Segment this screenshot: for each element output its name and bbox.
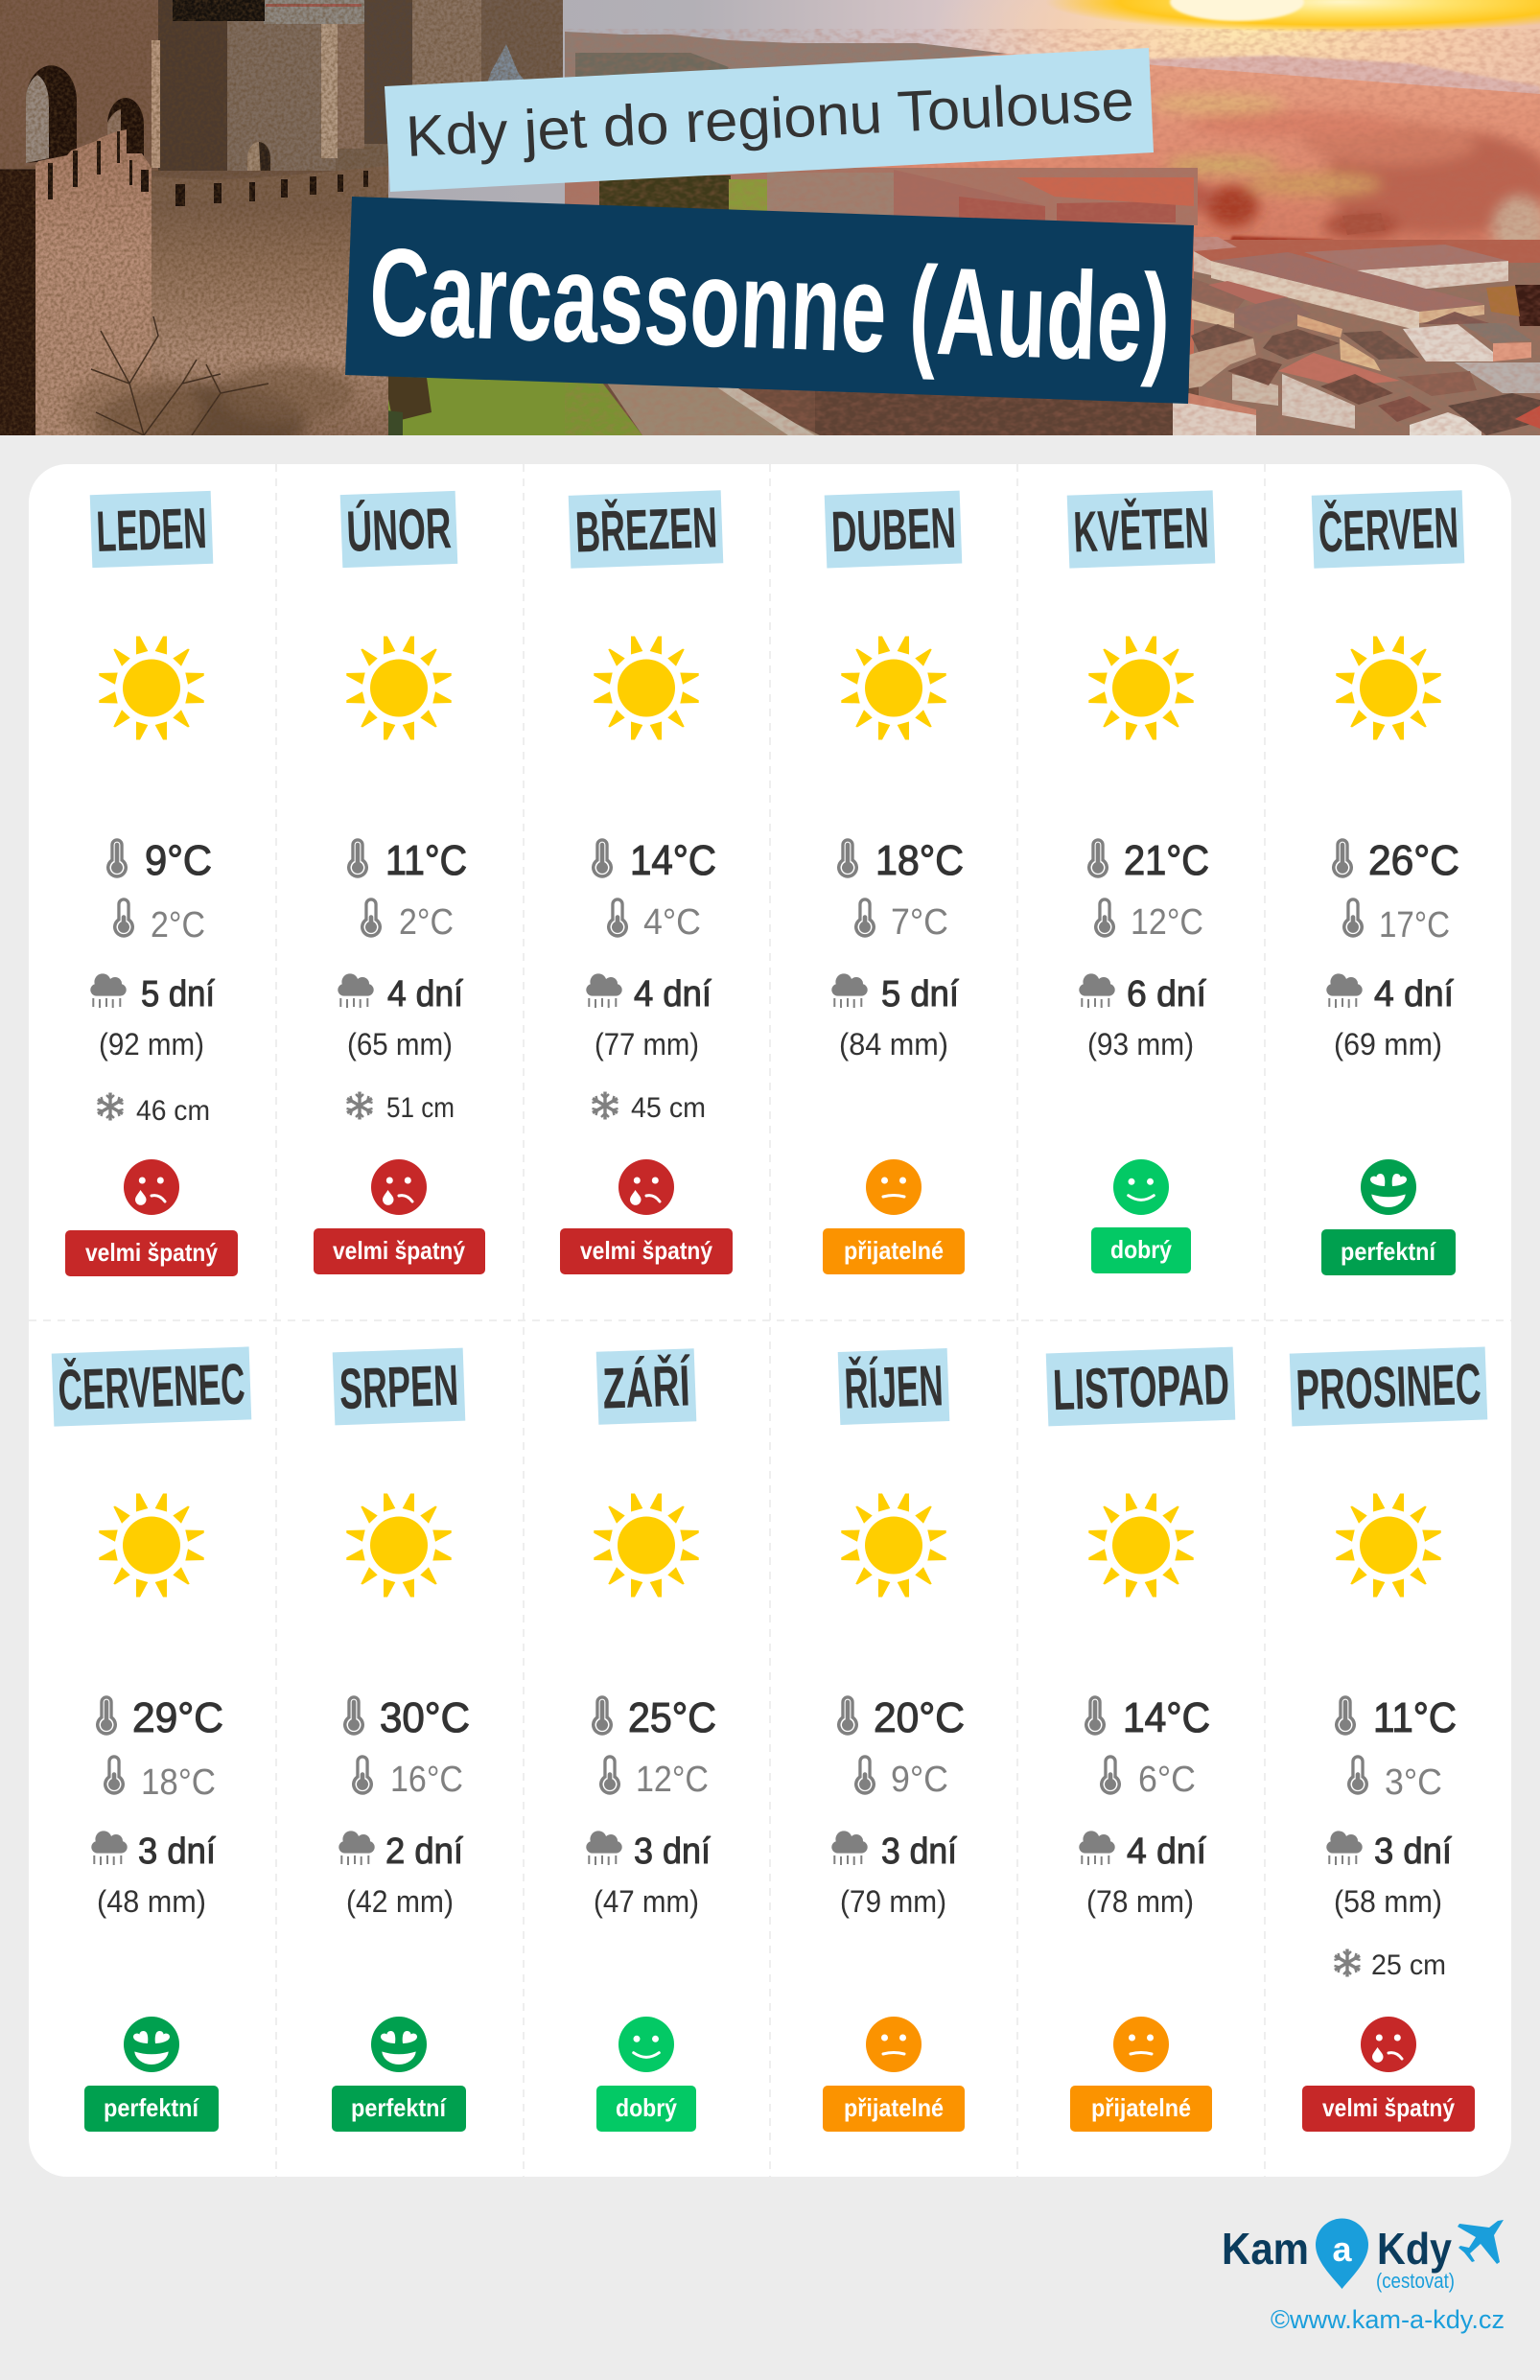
- month heading: LEDEN: [90, 491, 213, 568]
- panel: months table: [29, 464, 1511, 2177]
- icon: sun: [1336, 1494, 1441, 1598]
- rain days: [1326, 1831, 1452, 1872]
- rating badge: [823, 2086, 965, 2132]
- high temperature: [837, 837, 964, 884]
- rain days: [1079, 973, 1206, 1015]
- rain days: 4 dní: [634, 974, 712, 1015]
- month heading: DUBEN: [825, 491, 962, 568]
- month heading: LEDEN: LEDEN: [95, 496, 208, 564]
- rain days: 6 dní: [1127, 974, 1206, 1015]
- panel: PROSINEC: [1290, 1346, 1487, 2132]
- low temperature: 2°C: [151, 905, 205, 945]
- low temperature: [607, 898, 701, 943]
- logo: Kam a Kdy: [1222, 2219, 1504, 2293]
- panel: LEDEN: [65, 491, 238, 1276]
- rating badge: [65, 1230, 238, 1276]
- rating badge: přijatelné: [844, 2093, 944, 2122]
- icon: sun: [841, 637, 946, 740]
- rain days: 5 dní: [141, 974, 215, 1015]
- icon: rating face: [1361, 2017, 1416, 2072]
- town roofs and walls: [1173, 237, 1540, 435]
- rating badge: dobrý: [1110, 1235, 1172, 1264]
- rainfall: (92 mm): [99, 1027, 204, 1062]
- rain days: [831, 1831, 957, 1872]
- high temperature: [347, 837, 467, 884]
- low temperature: 3°C: [1385, 1762, 1442, 1803]
- low temperature: [352, 1755, 463, 1800]
- low temperature: [104, 1755, 216, 1803]
- icon: rating face: [618, 2017, 674, 2072]
- panel: ČERVENEC: [52, 1346, 251, 2132]
- icon: airplane: [1458, 2220, 1504, 2264]
- snow: 51 cm: [386, 1092, 455, 1124]
- rating badge: velmi špatný: [85, 1238, 218, 1267]
- low temperature: [1094, 898, 1203, 943]
- high temperature: [592, 837, 716, 884]
- low temperature: 17°C: [1379, 905, 1450, 945]
- logo: Kam a Kdy: (cestovat): [1376, 2269, 1455, 2293]
- high temperature: 25°C: [628, 1694, 716, 1741]
- rating badge: velmi špatný: [1322, 2093, 1455, 2122]
- rainfall: (69 mm): [1334, 1027, 1442, 1062]
- month heading: BŘEZEN: [569, 490, 723, 569]
- rain days: 5 dní: [881, 974, 959, 1015]
- month heading: ŘÍJEN: [838, 1348, 949, 1425]
- rainfall: (93 mm): [1087, 1027, 1194, 1062]
- rain days: 3 dní: [881, 1832, 957, 1872]
- snow: [98, 1093, 210, 1127]
- rating badge: [823, 1228, 965, 1274]
- rain days: [586, 1831, 711, 1872]
- icon: sun: [594, 1494, 699, 1598]
- rating badge: [1070, 2086, 1212, 2132]
- rating badge: [596, 2086, 696, 2132]
- icon: sun: [99, 1494, 204, 1598]
- high temperature: 30°C: [380, 1694, 470, 1741]
- icon: rating face: [371, 1159, 427, 1215]
- low temperature: [599, 1755, 709, 1800]
- rating badge: velmi špatný: [333, 1236, 465, 1265]
- rating badge: perfektní: [351, 2093, 447, 2122]
- snow: 25 cm: [1371, 1949, 1446, 1981]
- icon: sun: [1088, 1494, 1194, 1598]
- panel: ČERVEN: [1312, 490, 1464, 1275]
- icon: rating face: [866, 2017, 922, 2072]
- rain days: [91, 1831, 216, 1872]
- rain days: 4 dní: [1374, 974, 1454, 1015]
- low temperature: 2°C: [399, 902, 454, 943]
- rating badge: [84, 2086, 219, 2132]
- icon: sun: [1336, 637, 1441, 740]
- month heading: ÚNOR: [340, 491, 457, 568]
- castle: [0, 0, 563, 460]
- rain days: [338, 1831, 463, 1872]
- rainfall: (47 mm): [594, 1884, 699, 1919]
- low temperature: [1100, 1755, 1196, 1800]
- panel: ZÁŘÍ: [586, 1348, 716, 2132]
- high temperature: [106, 837, 212, 884]
- rain days: [1079, 1831, 1206, 1872]
- rain days: [90, 973, 215, 1015]
- month heading: DUBEN: DUBEN: [830, 496, 957, 564]
- month heading: BŘEZEN: BŘEZEN: [574, 495, 718, 565]
- high temperature: 11°C: [1373, 1694, 1457, 1741]
- month heading: LISTOPAD: [1046, 1347, 1235, 1426]
- month heading: ŘÍJEN: ŘÍJEN: [843, 1353, 945, 1421]
- panel: ŘÍJEN: [823, 1348, 965, 2132]
- high temperature: 20°C: [874, 1694, 965, 1741]
- icon: sun: [841, 1494, 946, 1598]
- icon: rating face: [1113, 2017, 1169, 2072]
- month heading: KVĚTEN: [1067, 490, 1215, 569]
- snow: 46 cm: [136, 1095, 210, 1127]
- rainfall: (77 mm): [595, 1027, 699, 1062]
- low temperature: 16°C: [390, 1760, 463, 1800]
- rating badge: přijatelné: [844, 1236, 944, 1265]
- icon: rating face: [866, 1159, 922, 1215]
- low temperature: [1347, 1755, 1442, 1803]
- high temperature: 11°C: [385, 837, 467, 884]
- icon: map pin: a: [1332, 2229, 1352, 2269]
- low temperature: 18°C: [141, 1762, 216, 1803]
- title banner: Carcassonne (Aude): [345, 197, 1194, 404]
- rain days: [338, 973, 463, 1015]
- rain days: 4 dní: [1127, 1832, 1206, 1872]
- month heading: ČERVENEC: [52, 1346, 251, 1427]
- month heading: ČERVENEC: ČERVENEC: [57, 1352, 246, 1422]
- icon: sun: [99, 637, 204, 740]
- rainfall: (48 mm): [97, 1884, 206, 1919]
- heading banner: Kdy jet do regionu Toulouse: [385, 48, 1154, 192]
- icon: rating face: [124, 1159, 179, 1215]
- icon: sun: [346, 1494, 452, 1598]
- rating badge: přijatelné: [1091, 2093, 1191, 2122]
- header photo: Carcassonne walls and town at sunset: [0, 0, 1540, 460]
- rainfall: (42 mm): [346, 1884, 454, 1919]
- high temperature: [592, 1694, 716, 1741]
- rating badge: [1302, 2086, 1475, 2132]
- rain days: 3 dní: [138, 1832, 216, 1872]
- ground below the title: [603, 384, 1199, 435]
- high temperature: 9°C: [145, 837, 212, 884]
- rating badge: [1091, 1227, 1191, 1273]
- icon: rating face: [124, 2017, 179, 2072]
- rating badge: velmi špatný: [580, 1236, 712, 1265]
- low temperature: [113, 898, 205, 945]
- rating badge: [332, 2086, 466, 2132]
- rain days: [1326, 973, 1454, 1015]
- high temperature: [1332, 837, 1459, 884]
- low temperature: 12°C: [1131, 902, 1203, 943]
- heading banner: Kdy jet do regionu Toulouse: Kdy jet do regionu Toulouse: [405, 68, 1135, 169]
- logo: Kam a Kdy: Kam: [1222, 2224, 1309, 2274]
- month heading: ZÁŘÍ: ZÁŘÍ: [601, 1353, 692, 1421]
- icon: rating face: [1361, 1159, 1416, 1215]
- month heading: LISTOPAD: LISTOPAD: [1052, 1352, 1230, 1422]
- rain days: 4 dní: [387, 974, 463, 1015]
- rating badge: perfektní: [104, 2093, 199, 2122]
- high temperature: [1335, 1694, 1457, 1741]
- month heading: SRPEN: SRPEN: [338, 1353, 459, 1421]
- rain days: 3 dní: [1374, 1832, 1452, 1872]
- snow: [347, 1091, 455, 1124]
- high temperature: [837, 1694, 965, 1741]
- high temperature: [96, 1694, 223, 1741]
- panel: BŘEZEN: [560, 490, 733, 1274]
- panel: KVĚTEN: [1067, 490, 1215, 1273]
- snow: 45 cm: [631, 1092, 706, 1124]
- rainfall: (79 mm): [840, 1884, 946, 1919]
- icon: rating face: [1113, 1159, 1169, 1215]
- low temperature: 6°C: [1138, 1760, 1196, 1800]
- month heading: ÚNOR: ÚNOR: [345, 496, 453, 564]
- high temperature: 18°C: [875, 837, 964, 884]
- rating badge: [560, 1228, 733, 1274]
- rating badge: [314, 1228, 485, 1274]
- panel: ÚNOR: [314, 491, 485, 1274]
- icon: sun: [594, 637, 699, 740]
- icon: rating face: [371, 2017, 427, 2072]
- low temperature: 12°C: [636, 1760, 709, 1800]
- low temperature: 7°C: [891, 902, 948, 943]
- snow: [1335, 1948, 1446, 1981]
- high temperature: 21°C: [1124, 837, 1209, 884]
- panel: DUBEN: [823, 491, 965, 1274]
- panel: SRPEN: [332, 1348, 470, 2132]
- rainfall: (84 mm): [839, 1027, 948, 1062]
- rainfall: (58 mm): [1334, 1884, 1442, 1919]
- rating badge: perfektní: [1341, 1237, 1436, 1266]
- icon: sun: [346, 637, 452, 740]
- rainfall: (65 mm): [347, 1027, 453, 1062]
- rain days: [586, 973, 712, 1015]
- icon: sun: [1088, 637, 1194, 740]
- panel: LISTOPAD: [1046, 1347, 1235, 2132]
- month heading: SRPEN: [333, 1348, 465, 1425]
- low temperature: [854, 1755, 948, 1800]
- high temperature: [343, 1694, 470, 1741]
- rating badge: [1321, 1229, 1456, 1275]
- high temperature: 29°C: [132, 1694, 223, 1741]
- icon: map pin: [1316, 2219, 1368, 2289]
- snow: [593, 1091, 706, 1124]
- rain days: 3 dní: [634, 1832, 711, 1872]
- high temperature: [1085, 1694, 1210, 1741]
- month heading: ZÁŘÍ: [596, 1348, 696, 1425]
- high temperature: 14°C: [630, 837, 716, 884]
- high temperature: 26°C: [1368, 837, 1459, 884]
- rating badge: dobrý: [616, 2093, 677, 2122]
- low temperature: [361, 898, 454, 943]
- low temperature: 4°C: [643, 902, 701, 943]
- rain days: [831, 973, 959, 1015]
- high temperature: 14°C: [1123, 1694, 1210, 1741]
- month heading: ČERVEN: [1312, 490, 1464, 569]
- rainfall: (78 mm): [1086, 1884, 1194, 1919]
- rain days: 2 dní: [385, 1832, 463, 1872]
- low temperature: [1342, 898, 1450, 945]
- month heading: KVĚTEN: KVĚTEN: [1072, 496, 1210, 564]
- low temperature: [854, 898, 948, 943]
- logo: Kam a Kdy: Kdy: [1377, 2224, 1452, 2274]
- low temperature: 9°C: [891, 1760, 948, 1800]
- high temperature: [1087, 837, 1209, 884]
- website link: ©www.kam-a-kdy.cz: [1271, 2305, 1505, 2334]
- icon: rating face: [618, 1159, 674, 1215]
